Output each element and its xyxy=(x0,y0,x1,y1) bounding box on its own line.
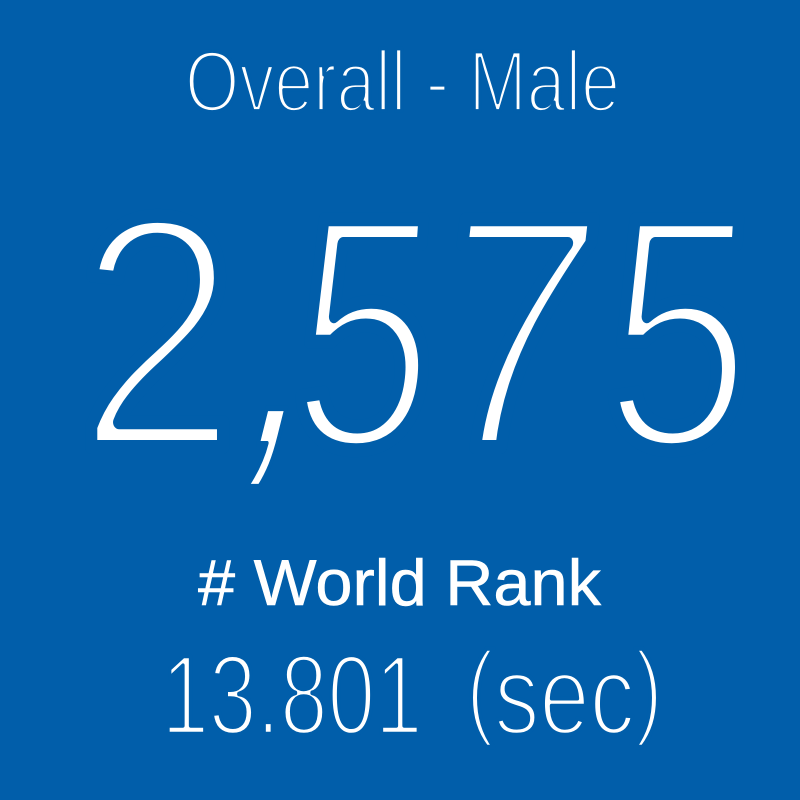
big number: world rank value: 5 xyxy=(596,147,765,518)
big number: world rank value: , xyxy=(222,140,371,515)
label: world rank: # World Rank xyxy=(198,546,602,619)
time value: ( xyxy=(466,630,494,748)
time value xyxy=(162,630,663,758)
title: Overall - Male xyxy=(185,34,620,130)
big number: world rank value: 2 xyxy=(77,147,238,517)
big number: world rank value: 7 xyxy=(417,148,616,518)
time value: 13.801 xyxy=(162,632,422,758)
time value: ) xyxy=(635,630,663,748)
time value: sec xyxy=(494,632,635,758)
big number: world rank value xyxy=(77,140,765,518)
big number: world rank value: 5 xyxy=(282,147,450,517)
